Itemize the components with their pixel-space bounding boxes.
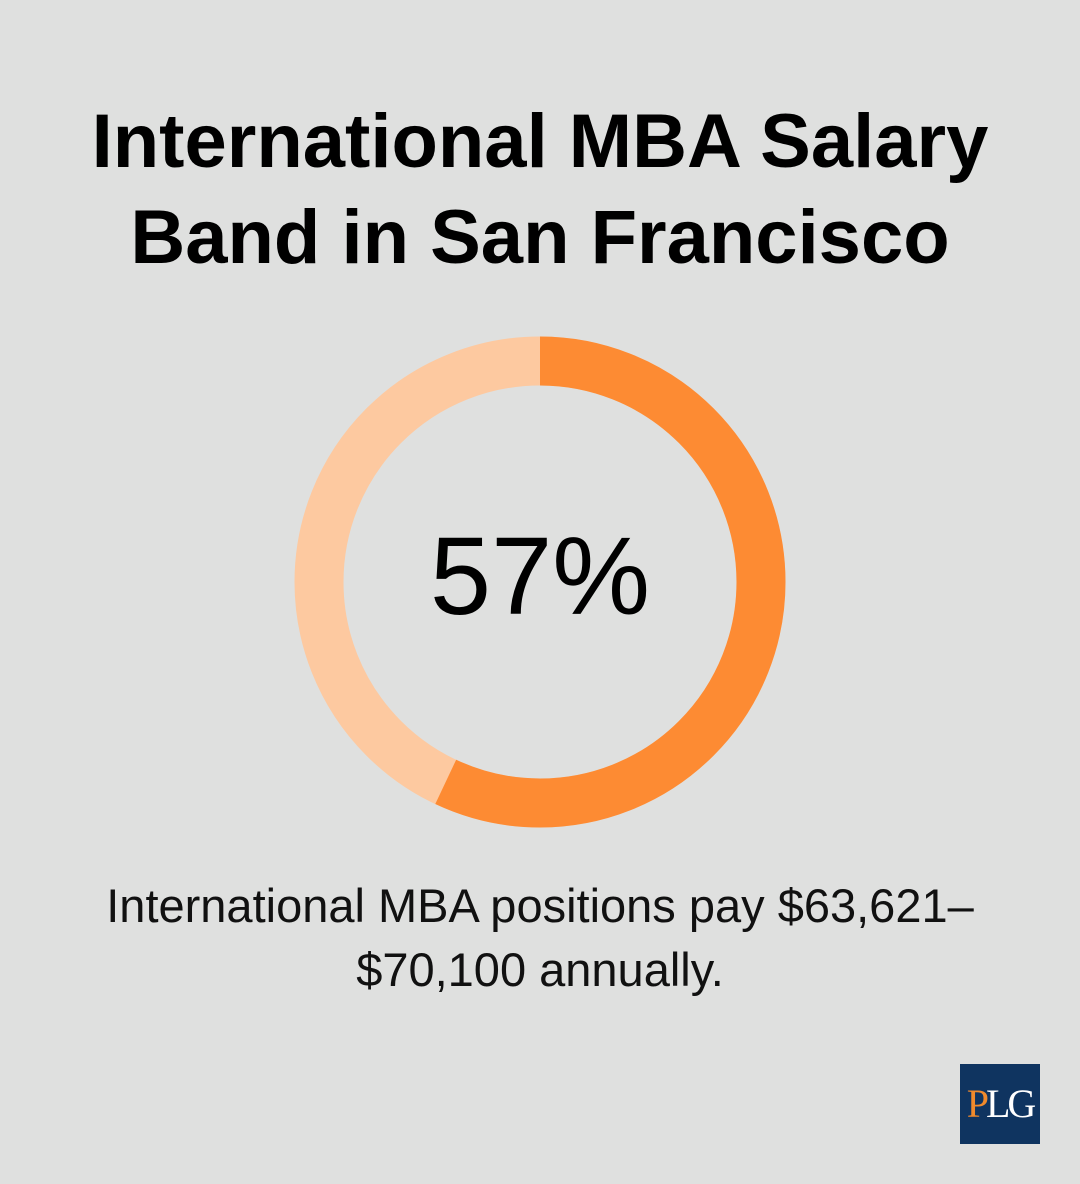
title: Band in San Francisco	[130, 195, 950, 280]
donut chart: 57%	[430, 515, 650, 638]
logo	[960, 1064, 1040, 1144]
title: International MBA Salary	[92, 99, 988, 184]
description	[106, 879, 974, 996]
description: $70,100 annually.	[356, 943, 724, 996]
title	[92, 99, 988, 280]
description: International MBA positions pay $63,621–	[106, 879, 974, 932]
logo: PLG	[967, 1081, 1033, 1126]
